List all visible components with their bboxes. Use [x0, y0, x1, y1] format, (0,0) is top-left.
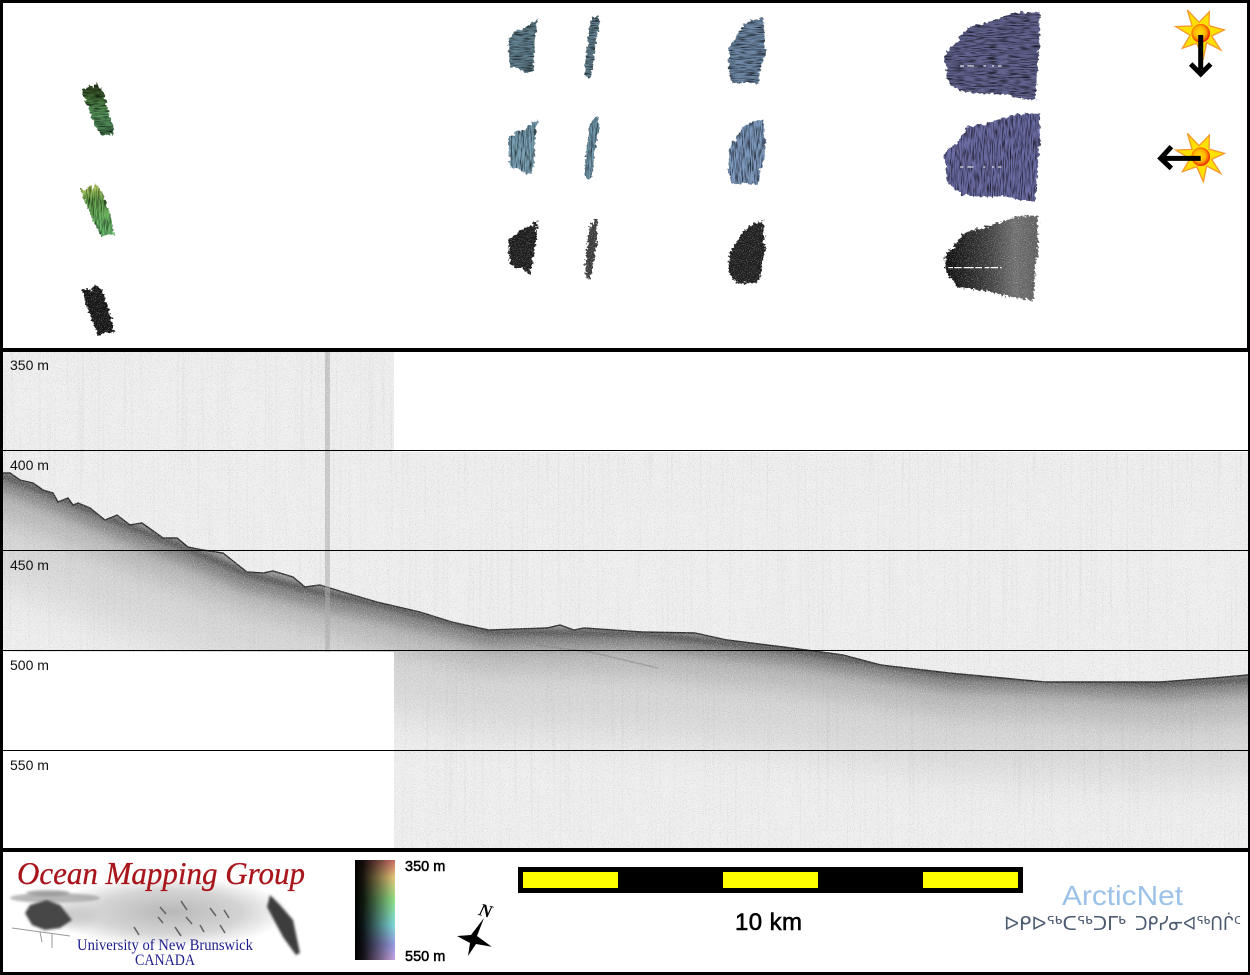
depth axis labels: 350 m — [10, 357, 49, 373]
panel: sonar depth profile — [0, 352, 1250, 848]
swath column: blue narrow patch — [584, 15, 599, 280]
vertical interference stripe — [325, 352, 330, 652]
icon: north arrow — [457, 899, 495, 956]
depth grid lines — [3, 450, 1248, 750]
swath column: small green survey patch — [81, 82, 115, 336]
scale bar: 10 km — [735, 909, 802, 936]
faint sub-bottom reflector — [536, 645, 658, 668]
logo: Ocean Mapping Group: University of New Brunswick — [77, 937, 253, 954]
scale bar — [518, 867, 1023, 936]
icon: north arrow: N — [476, 899, 495, 922]
legend: depth colour bar: 550 m — [405, 949, 445, 965]
legend: depth colour bar — [355, 859, 445, 965]
seabed echo line — [3, 473, 1248, 682]
noise texture — [3, 352, 1248, 848]
swath column: blue medium patch — [728, 18, 765, 283]
depth axis labels: 550 m — [10, 757, 49, 773]
logo: ArcticNet: ᐅᑭᐅᖅᑕᖅᑐᒥᒃ — [1004, 913, 1126, 935]
panel: footer with logos and legends — [3, 852, 1248, 972]
legend: depth colour bar: 350 m — [405, 859, 445, 875]
logo: ArcticNet — [1004, 880, 1241, 935]
logo: Ocean Mapping Group: Ocean Mapping Group — [17, 855, 305, 891]
swath column: blue patch one — [508, 18, 538, 274]
logo: Ocean Mapping Group — [10, 855, 310, 969]
logo: ArcticNet: ᑐᑭᓯᓂᐊᖅᑎᒌᑦ — [1135, 912, 1241, 935]
panel: backscatter swath mosaics — [3, 3, 1247, 348]
depth axis labels: 400 m — [10, 457, 49, 473]
logo: Ocean Mapping Group: CANADA — [135, 952, 196, 969]
logo: ArcticNet: ArcticNet — [1062, 880, 1183, 911]
icon: sun lit from east with arrow — [1161, 133, 1224, 182]
icon: sun lit from north with arrow — [1176, 10, 1224, 74]
depth axis labels: 500 m — [10, 657, 49, 673]
chart: sub-bottom sonar echogram — [0, 352, 1250, 848]
seabed acoustic shadow — [0, 460, 1250, 705]
depth axis labels: 450 m — [10, 557, 49, 573]
depth axis labels — [10, 357, 49, 773]
swath column: large violet patch — [943, 12, 1040, 300]
